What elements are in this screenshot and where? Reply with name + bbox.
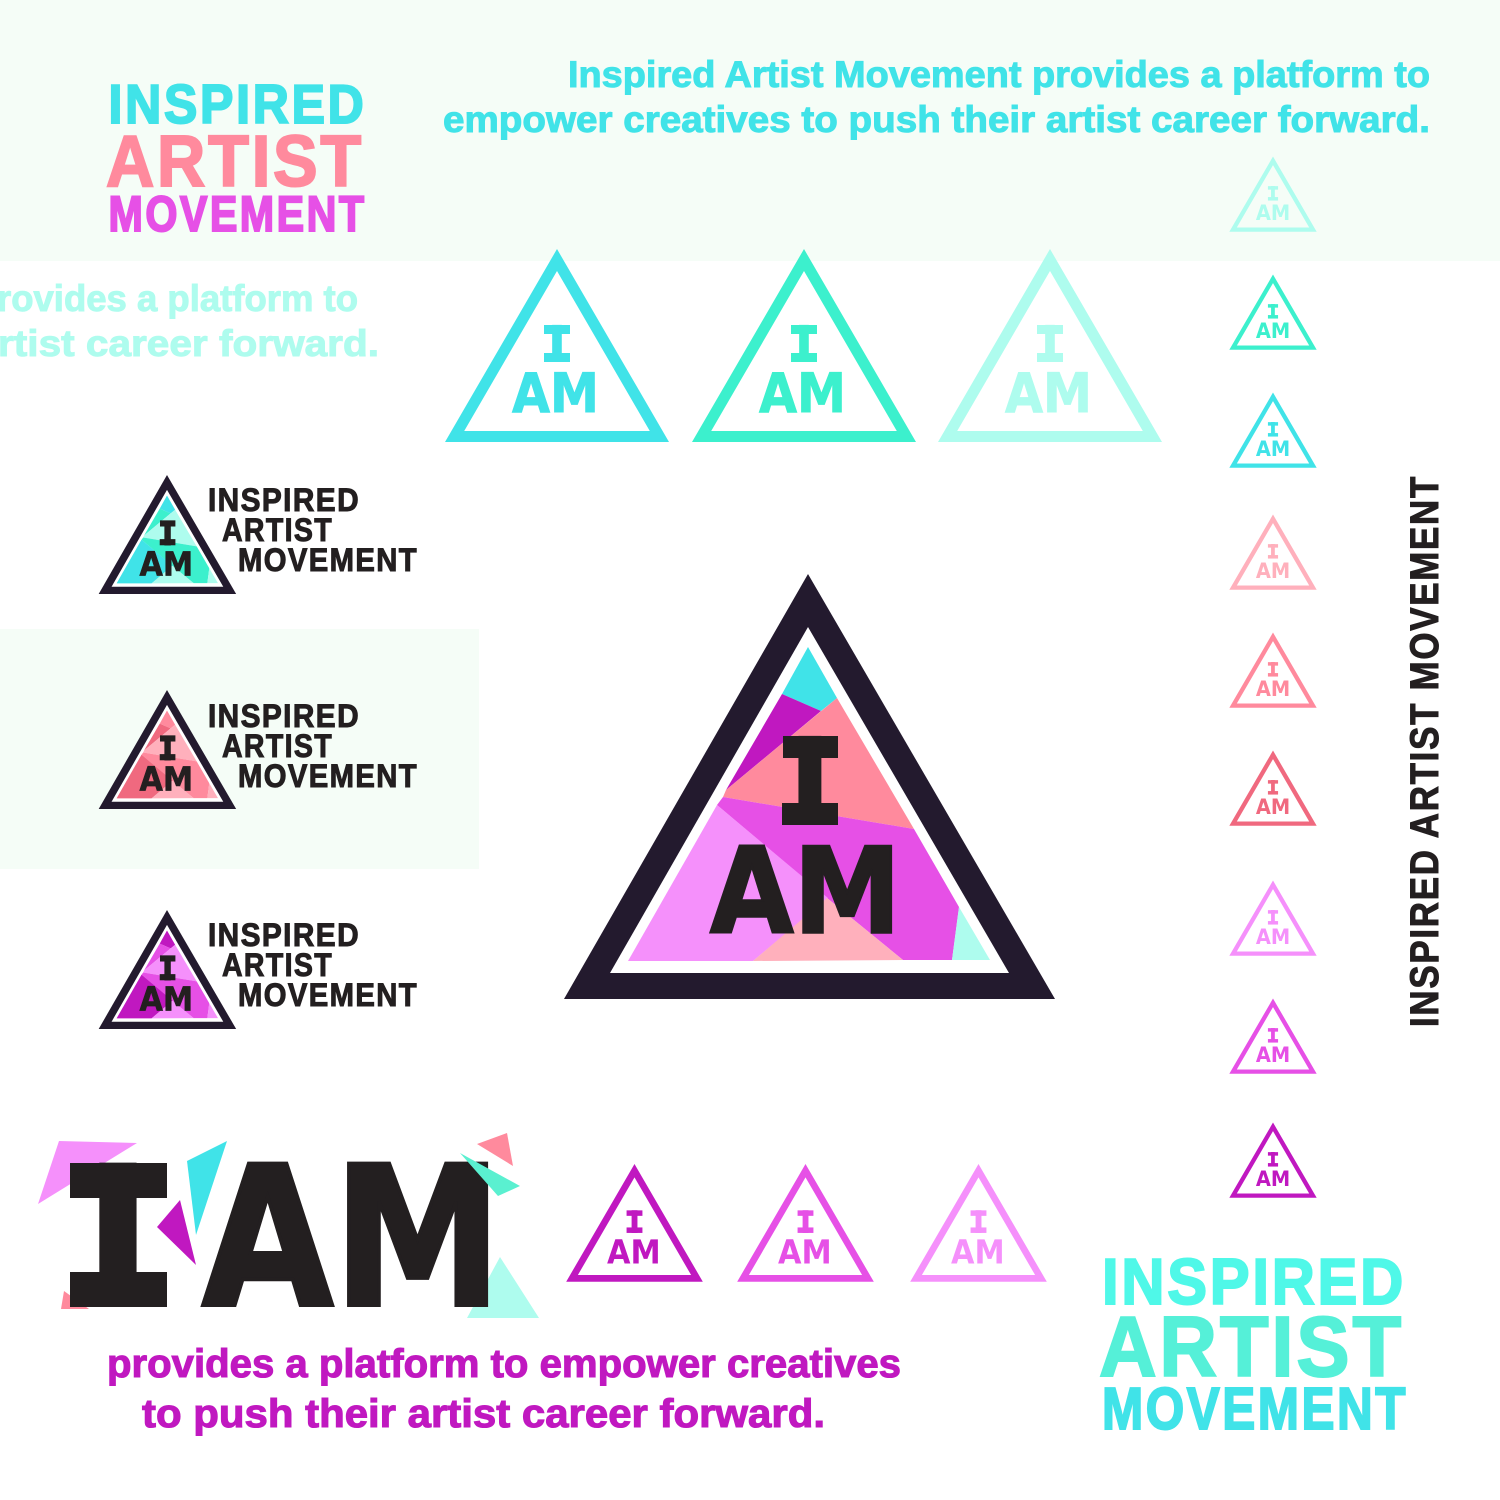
ghost text: clipped mission statement: rtist career forward. <box>0 323 379 364</box>
stacked logo: top: MOVEMENT <box>108 186 366 242</box>
icon: small pink: I <box>1269 659 1277 682</box>
wordmark <box>208 917 418 1013</box>
icon: purple triangle <box>99 910 236 1029</box>
icon: main I AM triangle: I <box>787 712 833 854</box>
icon: medium violet triangle: I <box>973 1205 984 1241</box>
panel: left logo band <box>0 629 479 869</box>
stacked logo: top: ARTIST <box>106 122 364 202</box>
logo: large I AM with shards: AM <box>202 1125 502 1351</box>
heading: mission statement: Inspired Artist Movement provides a platform to <box>568 54 1430 95</box>
icon: small coral <box>1229 750 1317 826</box>
icon: small mint <box>1229 274 1317 350</box>
tagline <box>107 1342 901 1436</box>
icon: small magenta: I <box>1269 1025 1277 1048</box>
wordmark: MOVEMENT <box>238 542 418 578</box>
heading: mission statement <box>443 54 1430 140</box>
icon: pale mint I AM triangle: AM <box>1005 362 1092 425</box>
stacked logo: bottom right <box>1099 1245 1408 1442</box>
tagline: to push their artist career forward. <box>142 1392 825 1436</box>
logo: large I AM with shards: I <box>81 1123 155 1354</box>
icon: medium magenta triangle: I <box>800 1205 811 1241</box>
stacked logo: bottom right: ARTIST <box>1099 1300 1404 1395</box>
stacked logo: top: INSPIRED <box>108 73 366 135</box>
icon: small pale mint: AM <box>1256 200 1290 225</box>
icon: pink triangle: I <box>161 729 174 769</box>
icon: medium purple triangle <box>566 1164 703 1282</box>
wordmark: MOVEMENT <box>238 977 418 1013</box>
icon: small purple <box>1229 1122 1317 1198</box>
icon: small light pink: AM <box>1256 558 1290 583</box>
vertical wordmark: INSPIRED ARTIST MOVEMENT <box>1403 475 1447 1027</box>
icon: small purple: I <box>1269 1149 1277 1172</box>
icon: small pale mint <box>1229 156 1317 232</box>
icon: small cyan: I <box>1269 419 1277 442</box>
icon: small cyan <box>1229 392 1317 468</box>
icon: teal triangle: I <box>161 514 174 554</box>
icon: mint I AM triangle <box>692 249 916 442</box>
icon: small pale mint: I <box>1269 183 1277 206</box>
icon: main I AM triangle <box>564 574 1055 999</box>
icon: small coral: I <box>1269 777 1277 800</box>
icon column: small triangles <box>1229 156 1317 1198</box>
icon: small mint: AM <box>1256 318 1290 343</box>
ghost text: clipped mission statement <box>0 278 379 364</box>
icon: small violet <box>1229 880 1317 956</box>
icon: small magenta <box>1229 998 1317 1074</box>
panel: top band <box>0 0 1500 261</box>
icon: teal triangle <box>99 475 236 594</box>
icon: small light pink <box>1229 514 1317 590</box>
wordmark: INSPIRED <box>208 482 360 518</box>
wordmark: ARTIST <box>222 512 333 548</box>
icon: small light pink: I <box>1269 541 1277 564</box>
icon: mint I AM triangle: AM <box>759 362 846 425</box>
icon: main I AM triangle: AM <box>710 824 901 962</box>
stacked logo: top <box>106 73 366 242</box>
icon: teal triangle: AM <box>140 544 193 583</box>
icon: small coral: AM <box>1256 794 1290 819</box>
stacked logo: bottom right: INSPIRED <box>1102 1245 1406 1318</box>
stacked logo: bottom right: MOVEMENT <box>1102 1376 1408 1442</box>
icon: medium purple triangle: AM <box>607 1232 661 1271</box>
heading: mission statement: empower creatives to push their artist career forward. <box>443 99 1430 140</box>
icon: medium purple triangle: I <box>629 1205 640 1241</box>
ghost text: clipped mission statement: rovides a platform to <box>0 278 358 319</box>
wordmark: INSPIRED <box>208 917 360 953</box>
icon: cyan I AM triangle <box>445 249 669 442</box>
tagline: provides a platform to empower creatives <box>107 1342 901 1386</box>
wordmark: ARTIST <box>222 947 333 983</box>
wordmark: ARTIST <box>222 728 333 764</box>
icon: pale mint I AM triangle: I <box>1041 316 1059 375</box>
icon: small violet: I <box>1269 907 1277 930</box>
icon: small cyan: AM <box>1256 436 1290 461</box>
icon: pale mint I AM triangle <box>938 249 1162 442</box>
icon: pink triangle <box>99 690 236 809</box>
icon: small pink <box>1229 632 1317 708</box>
icon: cyan I AM triangle: I <box>548 316 566 375</box>
logo: large I AM with shards <box>38 1123 539 1354</box>
logo: purple triangle with wordmark <box>99 910 418 1029</box>
wordmark <box>208 698 418 794</box>
icon: small magenta: AM <box>1256 1042 1290 1067</box>
icon: cyan I AM triangle: AM <box>512 362 599 425</box>
icon: small mint: I <box>1269 301 1277 324</box>
icon: small purple: AM <box>1256 1166 1290 1191</box>
icon: mint I AM triangle: I <box>795 316 813 375</box>
wordmark: MOVEMENT <box>238 758 418 794</box>
logo: pink triangle with wordmark <box>99 690 418 809</box>
icon: medium violet triangle <box>910 1164 1047 1282</box>
icon: medium violet triangle: AM <box>951 1232 1005 1271</box>
icon: small pink: AM <box>1256 676 1290 701</box>
icon: purple triangle: I <box>161 949 174 989</box>
icon: purple triangle: AM <box>140 979 193 1018</box>
icon: pink triangle: AM <box>140 759 193 798</box>
icon: small violet: AM <box>1256 924 1290 949</box>
icon: medium magenta triangle <box>737 1164 874 1282</box>
wordmark: INSPIRED <box>208 698 360 734</box>
icon: medium magenta triangle: AM <box>778 1232 832 1271</box>
logo: teal triangle with wordmark <box>99 475 418 594</box>
wordmark <box>208 482 418 578</box>
